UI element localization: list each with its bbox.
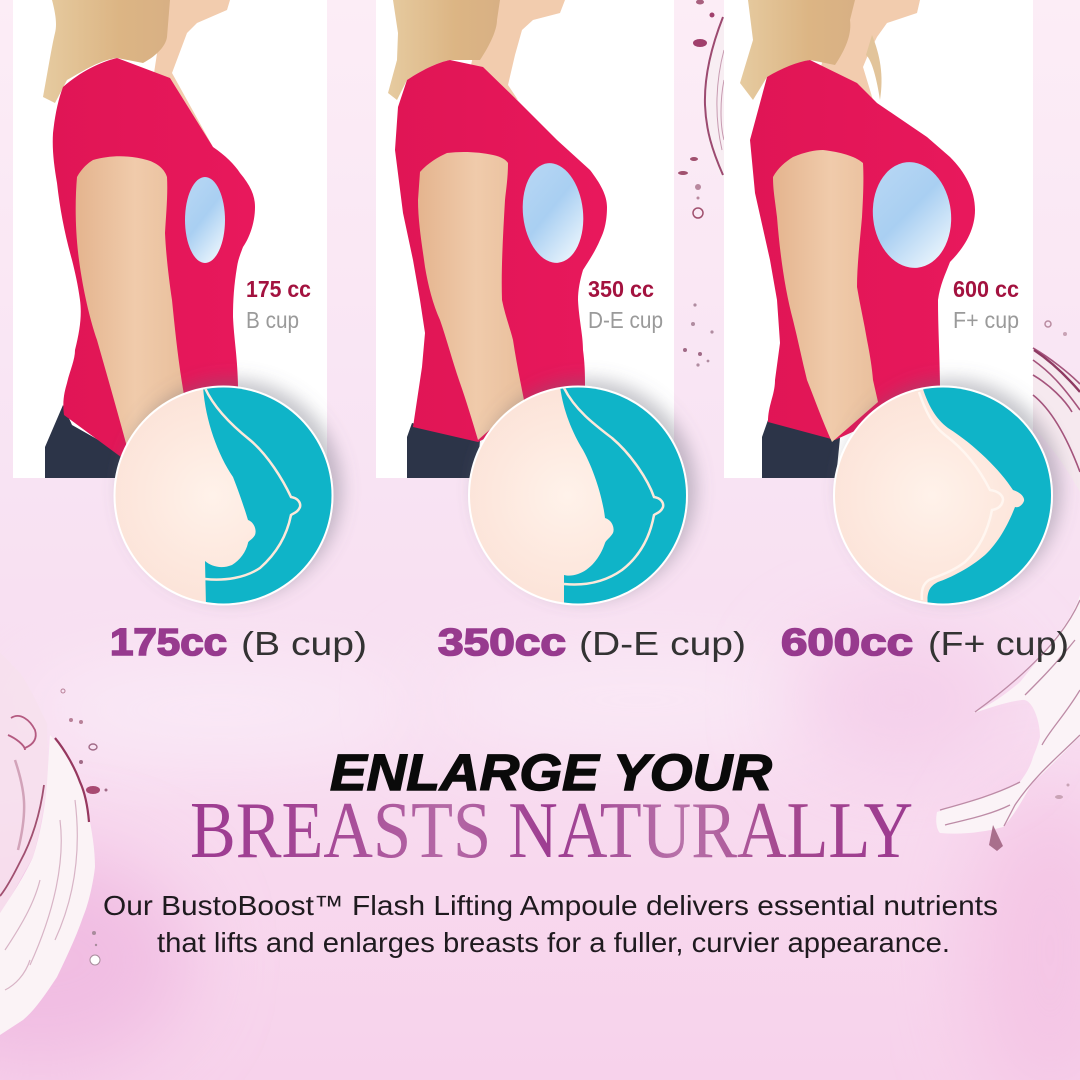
shirt	[53, 58, 255, 460]
label: 175cc (B cup): (B cup)	[241, 625, 367, 662]
caption: 175 cc: 175 cc	[246, 276, 311, 302]
label: 175cc (B cup)	[110, 622, 367, 664]
caption: 600 cc: 600 cc	[953, 276, 1019, 302]
caption: F+ cup: F+ cup	[953, 307, 1019, 333]
label: 350cc (D-E cup): 350cc	[438, 622, 566, 664]
caption: 350 cc: 350 cc	[588, 276, 654, 302]
photo panel: 175 cc	[13, 0, 327, 478]
hair wisp	[866, 35, 882, 100]
neck and chest skin	[820, 0, 920, 100]
label: 350cc (D-E cup): (D-E cup)	[579, 625, 746, 662]
arm	[76, 156, 184, 447]
photo panel: 350 cc	[376, 0, 674, 478]
arm	[773, 150, 878, 442]
water splash: left	[0, 653, 108, 1035]
photo panel: 600 cc	[724, 0, 1033, 478]
label: 600cc (F+ cup): 600cc	[781, 622, 913, 664]
jeans	[407, 423, 480, 478]
heading: breasts naturally: BREASTS NATURALLY	[190, 785, 913, 875]
hair	[388, 0, 500, 100]
implant	[868, 158, 956, 272]
jeans	[762, 420, 840, 478]
label: 350cc (D-E cup)	[438, 622, 746, 664]
implant	[185, 177, 225, 263]
label: 175cc (B cup): 175cc	[110, 622, 227, 664]
shirt	[750, 60, 975, 440]
neck and chest skin	[470, 0, 565, 100]
caption: B cup: B cup	[246, 307, 299, 333]
water splash: top centre	[678, 0, 724, 367]
diagram: 175cc profile	[114, 386, 340, 606]
hair	[740, 0, 855, 100]
body text: Our BustoBoost™ Flash Lifting Ampoule delivers essential nutrients	[103, 890, 998, 921]
implant	[518, 160, 588, 266]
heading: enlarge your: ENLARGE YOUR	[330, 744, 772, 801]
water splash: right	[936, 321, 1080, 851]
shirt	[395, 60, 607, 442]
neck and chest skin	[150, 0, 230, 147]
label: 600cc (F+ cup)	[781, 622, 1069, 664]
arm	[418, 152, 524, 440]
body text	[103, 890, 998, 958]
caption: D-E cup: D-E cup	[588, 307, 663, 333]
diagram: 600cc profile	[833, 386, 1060, 606]
diagram: 350cc profile	[468, 386, 700, 606]
jeans	[45, 405, 125, 478]
hair	[43, 0, 170, 103]
label: 600cc (F+ cup): (F+ cup)	[928, 625, 1069, 662]
body text: that lifts and enlarges breasts for a fuller, curvier appearance.	[157, 927, 950, 958]
